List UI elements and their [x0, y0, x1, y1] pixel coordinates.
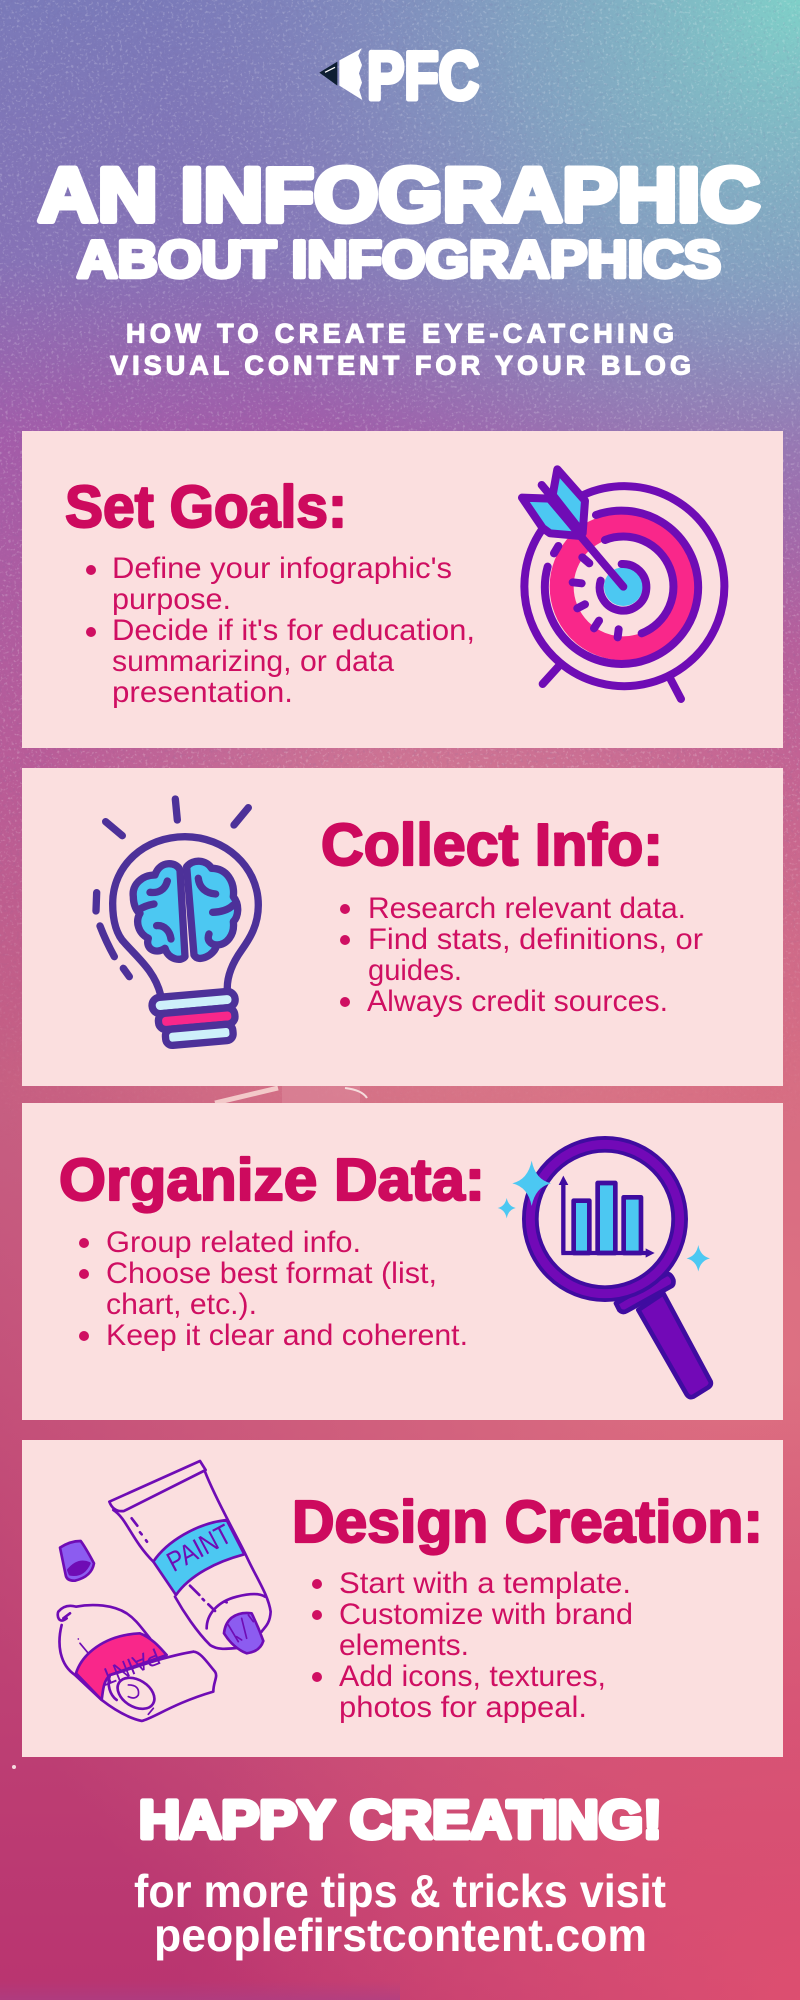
bullet list: collect info: Research relevant data.: [368, 892, 686, 925]
icon: paint tubes: [58, 1461, 271, 1721]
bullet list: set goals: presentation.: [112, 676, 293, 709]
bullet list: organize data: chart, etc.).: [106, 1288, 257, 1321]
bullet list: set goals: Decide if it's for education,: [112, 614, 475, 647]
logo: PFC: PFC: [367, 38, 479, 114]
icon: pencil tip: [319, 48, 362, 100]
heading: set goals: Set Goals:: [65, 474, 347, 540]
logo: PFC: [319, 38, 479, 114]
bullet list: organize data: Keep it clear and coherent.: [106, 1319, 468, 1352]
bullet list: set goals: Define your infographic's: [112, 552, 452, 585]
title: ABOUT INFOGRAPHICS: [77, 231, 721, 289]
subtitle: VISUAL CONTENT FOR YOUR BLOG: [110, 350, 691, 380]
heading: collect info: Collect Info:: [321, 812, 663, 878]
bullet list: collect info: Always credit sources.: [367, 985, 668, 1018]
subtitle: HOW TO CREATE EYE-CATCHING: [126, 318, 674, 348]
bullet list: collect info: guides.: [368, 954, 462, 987]
subtitle: [110, 318, 691, 380]
bullet list: collect info: Find stats, definitions, or: [368, 923, 703, 956]
bullet list: design creation: [312, 1567, 633, 1724]
bullet list: design creation: Customize with brand: [339, 1598, 633, 1631]
title: AN INFOGRAPHIC: [38, 153, 760, 238]
bullet list: organize data: Choose best format (list,: [106, 1257, 437, 1290]
bullet list: set goals: [86, 552, 475, 709]
icon: lightbulb with brain: [96, 799, 258, 1047]
icon: paint tubes: PAINT: [96, 1642, 164, 1690]
closing heading: HAPPY CREATING!: [139, 1790, 662, 1850]
icon: paint tubes: PAINT: [162, 1518, 236, 1578]
call to action: peoplefirstcontent.com: [154, 1909, 647, 1961]
bullet list: organize data: Group related info.: [106, 1226, 361, 1259]
panel: collect info: [22, 768, 783, 1086]
heading: design creation: Design Creation:: [292, 1489, 763, 1555]
bullet list: set goals: purpose.: [112, 583, 231, 616]
bullet list: design creation: photos for appeal.: [339, 1691, 587, 1724]
icon: magnifying glass with bar chart: [498, 1144, 711, 1397]
bullet list: set goals: summarizing, or data: [112, 645, 394, 678]
call to action: [134, 1865, 666, 1961]
title: [38, 153, 760, 289]
call to action: for more tips & tricks visit: [134, 1865, 666, 1917]
bullet list: design creation: Add icons, textures,: [339, 1660, 606, 1693]
icon: target with arrow: [522, 469, 724, 699]
bullet list: collect info: [340, 892, 703, 1018]
panel: design creation: [22, 1440, 783, 1757]
bullet list: design creation: elements.: [339, 1629, 469, 1662]
bullet list: design creation: Start with a template.: [339, 1567, 631, 1600]
panel: organize data: [22, 1103, 783, 1420]
panel: set goals: [22, 431, 783, 748]
heading: organize data: Organize Data:: [59, 1147, 485, 1213]
bullet list: organize data: [79, 1226, 468, 1352]
